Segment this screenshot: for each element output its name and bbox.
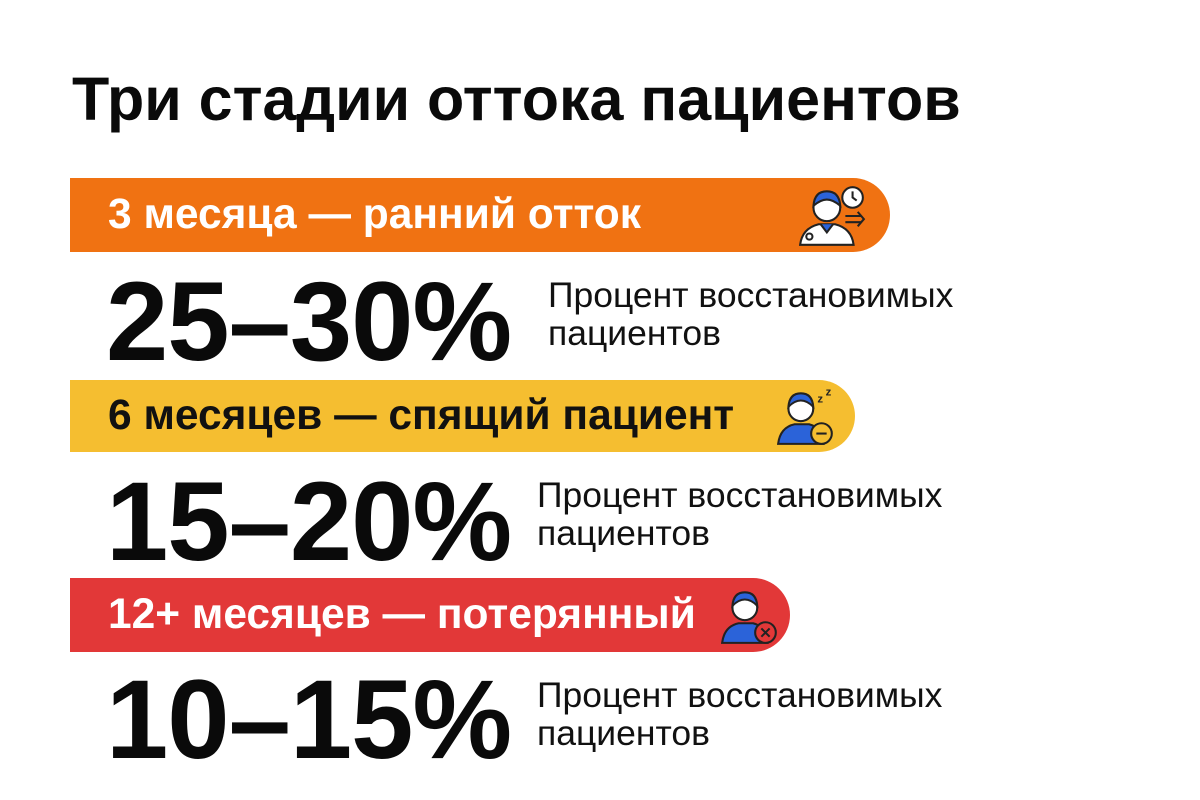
description 1: пациентов bbox=[548, 313, 721, 353]
bar: stage 2: 6 месяцев — спящий пациент bbox=[108, 392, 734, 439]
icon: lost patient bbox=[721, 591, 777, 644]
description 1: Процент восстановимых bbox=[548, 275, 953, 315]
icon: sleeping patient: z bbox=[826, 386, 832, 398]
bar: stage 3 bbox=[70, 578, 790, 652]
stat: 25–30%: 25–30% bbox=[106, 259, 511, 384]
title: Три стадии оттока пациентов bbox=[72, 65, 961, 133]
description 2 bbox=[537, 475, 942, 553]
description 3 bbox=[537, 675, 942, 753]
description 3: пациентов bbox=[537, 713, 710, 753]
bar: stage 3: 12+ месяцев — потерянный bbox=[108, 591, 696, 638]
stat: 15–20%: 15–20% bbox=[106, 459, 511, 584]
stat: 10–15%: 10–15% bbox=[106, 657, 511, 782]
icon: doctor with clock bbox=[798, 186, 866, 246]
icon: sleeping patient: z bbox=[817, 394, 823, 406]
description 2: Процент восстановимых bbox=[537, 475, 942, 515]
description 1 bbox=[548, 275, 953, 353]
description 2: пациентов bbox=[537, 513, 710, 553]
bar: stage 2 bbox=[70, 380, 855, 452]
bar: stage 1 bbox=[70, 178, 890, 252]
icon: sleeping patient bbox=[777, 386, 833, 445]
description 3: Процент восстановимых bbox=[537, 675, 942, 715]
bar: stage 1: 3 месяца — ранний отток bbox=[108, 191, 641, 238]
